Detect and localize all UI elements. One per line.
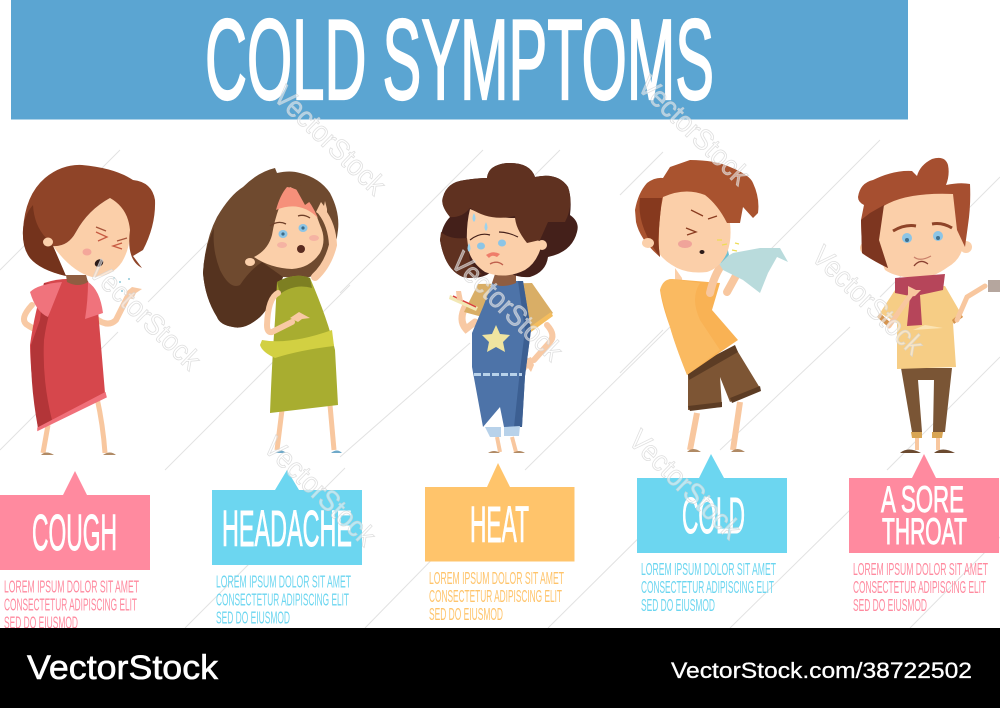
footer image id: VectorStock.com/38722502 — [671, 658, 972, 683]
text: VectorStock — [805, 240, 930, 362]
description: cold: SED DO EIUSMOD — [641, 595, 715, 615]
label: headache: LOREM IPSUM DOLOR SIT AMET — [216, 572, 351, 592]
label: a sore throat — [849, 454, 999, 615]
label: cold: COLD — [682, 487, 745, 544]
label: heat: HEAT — [470, 496, 529, 553]
label: headache: CONSECTETUR ADIPISCING ELIT — [216, 590, 349, 610]
character: girl with headache — [203, 168, 342, 453]
text: VectorStock — [267, 80, 392, 202]
description: cold — [641, 559, 776, 615]
character: girl coughing — [23, 165, 155, 455]
label: cold — [637, 454, 787, 615]
label: cough — [0, 471, 150, 632]
text: VectorStock — [622, 424, 747, 546]
description: heat — [429, 568, 564, 624]
character: boy with sore throat — [858, 158, 1000, 453]
character: boy sneezing into tissue — [635, 160, 788, 452]
label: heat: CONSECTETUR ADIPISCING ELIT — [429, 586, 562, 606]
label: heat: LOREM IPSUM DOLOR SIT AMET — [429, 568, 564, 588]
text: VectorStock — [82, 255, 207, 377]
description: headache: SED DO EIUSMOD — [216, 608, 290, 628]
label: cough: CONSECTETUR ADIPISCING ELIT — [4, 594, 137, 614]
label: cold: LOREM IPSUM DOLOR SIT AMET — [641, 559, 776, 579]
label: heat — [425, 463, 574, 624]
label: cough: COUGH — [32, 504, 117, 561]
label: cold: CONSECTETUR ADIPISCING ELIT — [641, 577, 774, 597]
description: cough: SED DO EIUSMOD — [4, 612, 78, 632]
text: HEADACHE — [222, 500, 352, 557]
description: heat: SED DO EIUSMOD — [429, 604, 503, 624]
text: VectorStock — [257, 431, 382, 553]
footer brand: VectorStock — [27, 649, 219, 687]
text: VectorStock — [444, 246, 569, 368]
label: headache — [212, 470, 362, 628]
title banner — [11, 0, 908, 124]
label: cough: LOREM IPSUM DOLOR SIT AMET — [4, 576, 139, 596]
description: cough — [4, 576, 139, 632]
footer bar — [0, 628, 1000, 708]
character: child with fever and thermometer — [440, 163, 578, 453]
description: a sore throat — [853, 559, 988, 615]
description: headache — [216, 572, 351, 628]
text: VectorStock — [631, 70, 756, 192]
